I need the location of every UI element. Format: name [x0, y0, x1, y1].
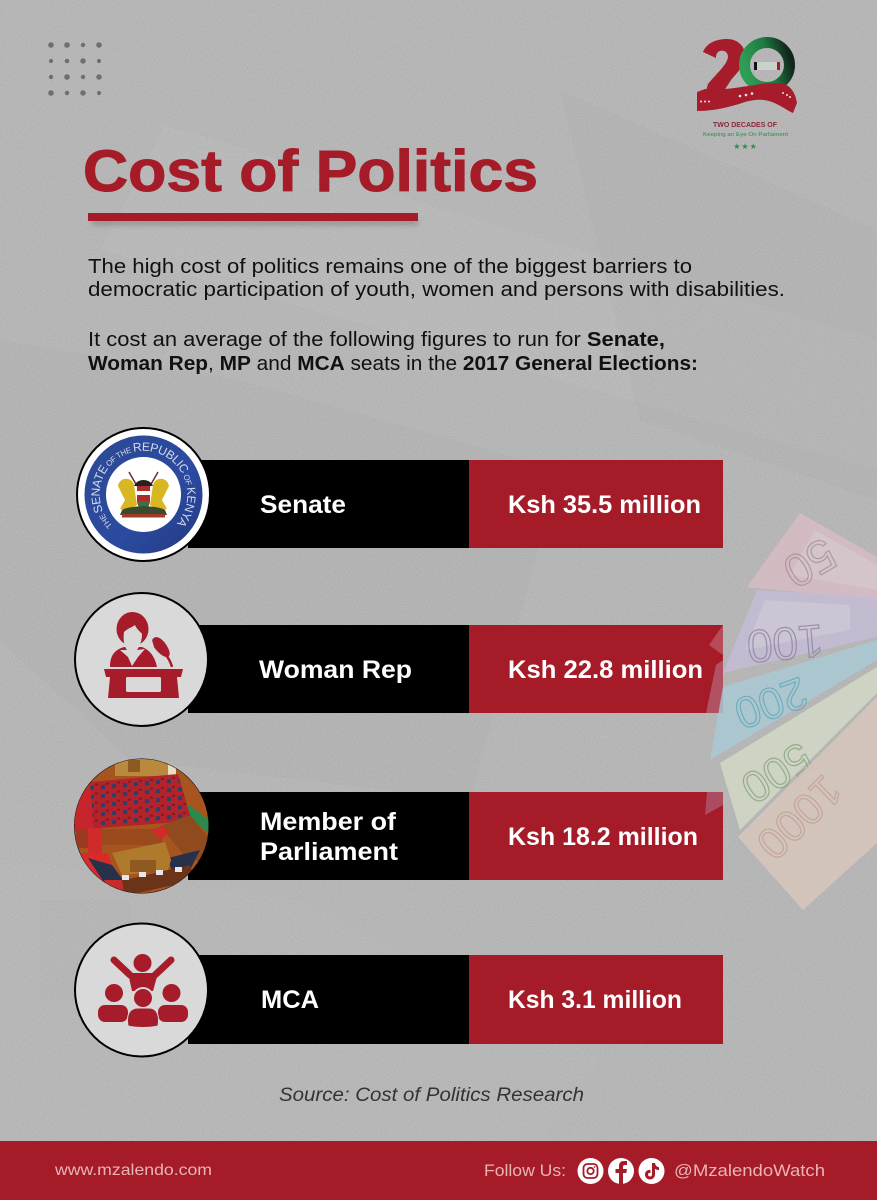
logo: 20 years of Mzalendo: [697, 39, 797, 151]
cost statement paragraph: It cost an average of the following figures to run for Senate,: [88, 329, 665, 351]
icon: TikTok: [638, 1158, 664, 1184]
icon: Senate seal: [76, 427, 209, 562]
cost statement paragraph: [88, 329, 698, 375]
note: 200: 200: [728, 667, 814, 738]
website: www.mzalendo.com: [54, 1162, 212, 1179]
note: 500: [720, 667, 877, 830]
logo numeral 2: [703, 39, 745, 94]
banknotes fan: [705, 513, 877, 910]
Woman Rep label: Woman Rep: [259, 656, 412, 684]
translucent note edges over red bars: [705, 625, 723, 815]
Member of Parliament label: [260, 808, 399, 866]
Woman Rep label bar: [188, 625, 469, 713]
intro paragraph: democratic participation of youth, women and persons with disabilities.: [88, 279, 785, 301]
note: 1000: 1000: [747, 765, 851, 869]
icon: Facebook: [608, 1158, 634, 1184]
note: 50: 50: [775, 528, 845, 599]
Senate label bar: [188, 460, 469, 548]
Senate value bar: [469, 460, 723, 548]
Woman Rep value: Ksh 22.8 million: [508, 656, 703, 684]
logo caption: TWO DECADES OF: [713, 122, 778, 129]
MCA value: Ksh 3.1 million: [508, 986, 682, 1014]
row: Senate: [76, 427, 723, 562]
Senate label: Senate: [260, 491, 346, 519]
footer band: [0, 1141, 877, 1200]
intro paragraph: [88, 256, 785, 301]
decorative dot grid: [48, 42, 102, 96]
icon: woman at podium: [75, 593, 208, 726]
note: 200: [710, 640, 877, 760]
logo ribbon stars: [700, 92, 791, 102]
Senate value: Ksh 35.5 million: [508, 491, 701, 519]
row: Member of Parliament: [74, 758, 723, 896]
social handle: @MzalendoWatch: [674, 1161, 825, 1180]
cost statement paragraph: Woman Rep, MP and MCA seats in the 2017 General Elections:: [88, 353, 698, 375]
logo tagline: Keeping an Eye On Parliament: [703, 132, 789, 138]
icon: group of people: [75, 924, 208, 1056]
title: Cost of Politics: [83, 139, 538, 204]
note: 100: [723, 590, 877, 673]
logo badge: [754, 62, 780, 70]
MCA label: MCA: [261, 986, 319, 1014]
note: 1000: [738, 697, 877, 910]
intro paragraph: The high cost of politics remains one of the biggest barriers to: [88, 256, 692, 278]
icon: Instagram: [578, 1158, 604, 1184]
note: 50: [747, 513, 877, 600]
Member of Parliament label bar: [188, 792, 469, 880]
Member of Parliament value bar: [469, 792, 723, 880]
follow us label: Follow Us:: [484, 1161, 566, 1180]
logo ribbon: [697, 83, 797, 113]
row: Woman Rep: [75, 593, 723, 726]
logo stars: ★★★: [733, 142, 758, 151]
Member of Parliament value: Ksh 18.2 million: [508, 823, 698, 851]
source note: Source: Cost of Politics Research: [279, 1085, 584, 1106]
note: 500: 500: [732, 732, 821, 813]
note: 100: 100: [745, 615, 826, 673]
Member of Parliament label: Member of: [260, 808, 397, 836]
title underline: [88, 213, 418, 225]
MCA value bar: [469, 955, 723, 1044]
logo ring: [744, 42, 790, 88]
Woman Rep value bar: [469, 625, 723, 713]
MCA label bar: [188, 955, 469, 1044]
icon: parliament chamber photo: [74, 758, 209, 896]
Member of Parliament label: Parliament: [260, 838, 399, 866]
icon: Senate seal: THE SENATE OF THE REPUBLIC OF KENYA: [91, 442, 196, 530]
row: MCA: [75, 924, 723, 1056]
